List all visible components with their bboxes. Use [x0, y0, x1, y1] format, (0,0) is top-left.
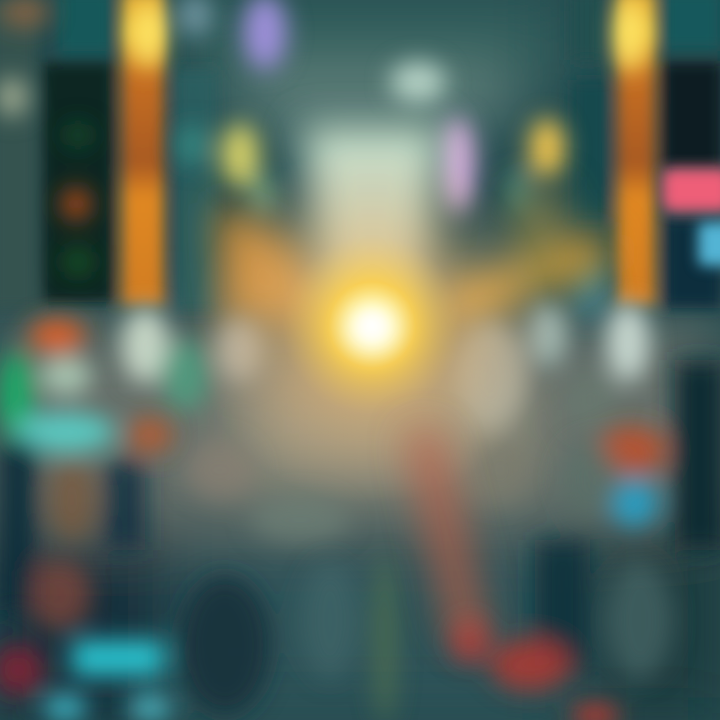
small building lights — [0, 0, 644, 320]
warm side glow bands — [215, 190, 605, 330]
blue sign — [698, 222, 720, 266]
street level colour patches — [0, 319, 720, 720]
building columns — [0, 0, 720, 310]
pale light shaft above the sun — [300, 125, 445, 320]
red light trail — [405, 430, 490, 640]
pale hazy towers — [121, 302, 650, 544]
sun core — [348, 306, 396, 350]
sun glow — [192, 145, 552, 505]
pink sign — [662, 168, 720, 212]
